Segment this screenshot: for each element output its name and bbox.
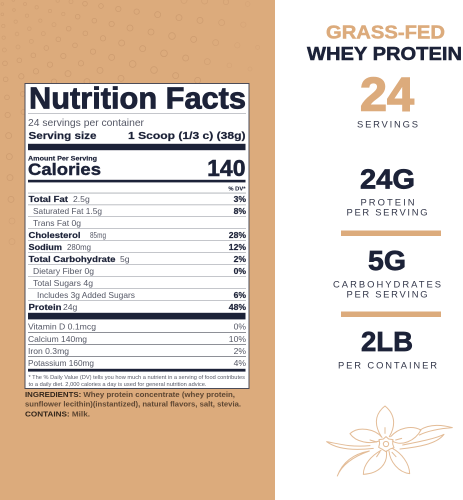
nutrient rows: Sodium bbox=[28, 242, 62, 252]
vitamins and minerals bbox=[28, 322, 246, 368]
nutrient rows: 28% bbox=[229, 230, 246, 240]
stat: 2LB per container: 2LB bbox=[361, 326, 413, 357]
calories: 140 bbox=[207, 155, 246, 181]
nutrient rows: 24g bbox=[63, 302, 78, 312]
serving size: 1 Scoop (1/3 c) (38g) bbox=[128, 131, 246, 142]
vitamins and minerals: 0% bbox=[234, 322, 246, 332]
nutrient rows: Cholesterol bbox=[28, 230, 80, 240]
ingredients text: INGREDIENTS: Whey protein concentrate (whey protein, bbox=[25, 390, 235, 399]
nutrient rows: 8% bbox=[234, 206, 246, 216]
nutrient rows: 5g bbox=[120, 254, 130, 264]
heading: Nutrition Facts: Nutrition Facts bbox=[29, 82, 246, 116]
nutrient rows: 3% bbox=[234, 194, 246, 204]
nutrient rows: Total Carbohydrate bbox=[28, 254, 116, 264]
stat: 24G protein per serving: PROTEIN bbox=[360, 196, 414, 207]
vitamins and minerals: 4% bbox=[234, 358, 246, 368]
footnote bbox=[28, 375, 245, 388]
nutrient rows: 85mg bbox=[90, 230, 106, 240]
footnote: * The % Daily Value (DV) tells you how much a nutrient in a serving of food contributes bbox=[28, 375, 245, 381]
stat: 24 servings: 24 bbox=[360, 68, 414, 120]
heading: Grass-Fed Whey Protein bbox=[307, 22, 462, 64]
stat: 2LB per container: PER CONTAINER bbox=[338, 359, 437, 370]
nutrient rows: 280mg bbox=[67, 242, 91, 252]
nutrient rows: Saturated Fat 1.5g bbox=[33, 206, 102, 216]
vitamins and minerals: 10% bbox=[229, 334, 246, 344]
serving size: Serving size bbox=[28, 131, 97, 142]
nutrient rows: 2.5g bbox=[73, 194, 90, 204]
vitamins and minerals: 2% bbox=[234, 346, 246, 356]
ingredients text: CONTAINS: Milk. bbox=[25, 410, 90, 418]
nutrient rows: Protein bbox=[28, 302, 62, 312]
stat: 5G carbohydrates per serving: 5G bbox=[368, 245, 406, 276]
calories: Amount Per Serving bbox=[28, 156, 97, 162]
bubble pattern bbox=[1, 0, 260, 245]
servings per container: 24 servings per container bbox=[28, 118, 145, 129]
panel: tan background bbox=[0, 0, 275, 500]
stat: 24G protein per serving: 24G bbox=[360, 164, 415, 194]
nutrient rows: 0% bbox=[234, 266, 246, 276]
nutrient rows bbox=[28, 194, 246, 312]
nutrient rows: Total Sugars 4g bbox=[33, 278, 93, 288]
nutrient rows: Trans Fat 0g bbox=[33, 218, 81, 228]
nutrient rows: 12% bbox=[229, 242, 246, 252]
vitamins and minerals: Calcium 140mg bbox=[28, 334, 87, 344]
stat: 24 servings: SERVINGS bbox=[357, 118, 418, 129]
nutrient rows: Dietary Fiber 0g bbox=[33, 266, 94, 276]
stat: 24G protein per serving: PER SERVING bbox=[346, 207, 428, 218]
footnote: to a daily diet. 2,000 calories a day is used for general nutrition advice. bbox=[28, 382, 207, 388]
vitamins and minerals: Potassium 160mg bbox=[28, 358, 94, 368]
calories: Calories bbox=[28, 160, 101, 179]
stat: 5G carbohydrates per serving: PER SERVING bbox=[346, 288, 428, 299]
nutrient rows: 6% bbox=[234, 290, 246, 300]
serving size bbox=[28, 131, 246, 142]
stat: 24G protein per serving bbox=[346, 164, 428, 218]
heading: Grass-Fed Whey Protein: GRASS-FED bbox=[326, 22, 445, 42]
ingredients text: sunflower lecithin)(instantized), natural flavors, salt, stevia. bbox=[25, 400, 241, 408]
heading: Grass-Fed Whey Protein: WHEY PROTEIN bbox=[307, 43, 462, 64]
nutrition facts label bbox=[25, 82, 249, 388]
vitamins and minerals: Iron 0.3mg bbox=[28, 346, 69, 356]
icon: vanilla flower bbox=[327, 406, 452, 476]
nutrient rows: 48% bbox=[229, 302, 246, 312]
calories bbox=[28, 155, 246, 181]
nutrition facts label: % DV* bbox=[228, 186, 246, 192]
stat: 5G carbohydrates per serving bbox=[333, 245, 441, 299]
vitamins and minerals: Vitamin D 0.1mcg bbox=[28, 322, 96, 332]
nutrient rows: Total Fat bbox=[28, 194, 68, 204]
nutrient rows: 2% bbox=[234, 254, 246, 264]
ingredients text bbox=[25, 390, 241, 418]
stat: 2LB per container bbox=[338, 326, 437, 370]
nutrient rows: Includes 3g Added Sugars bbox=[37, 290, 135, 300]
stat: 5G carbohydrates per serving: CARBOHYDRATES bbox=[333, 278, 441, 289]
